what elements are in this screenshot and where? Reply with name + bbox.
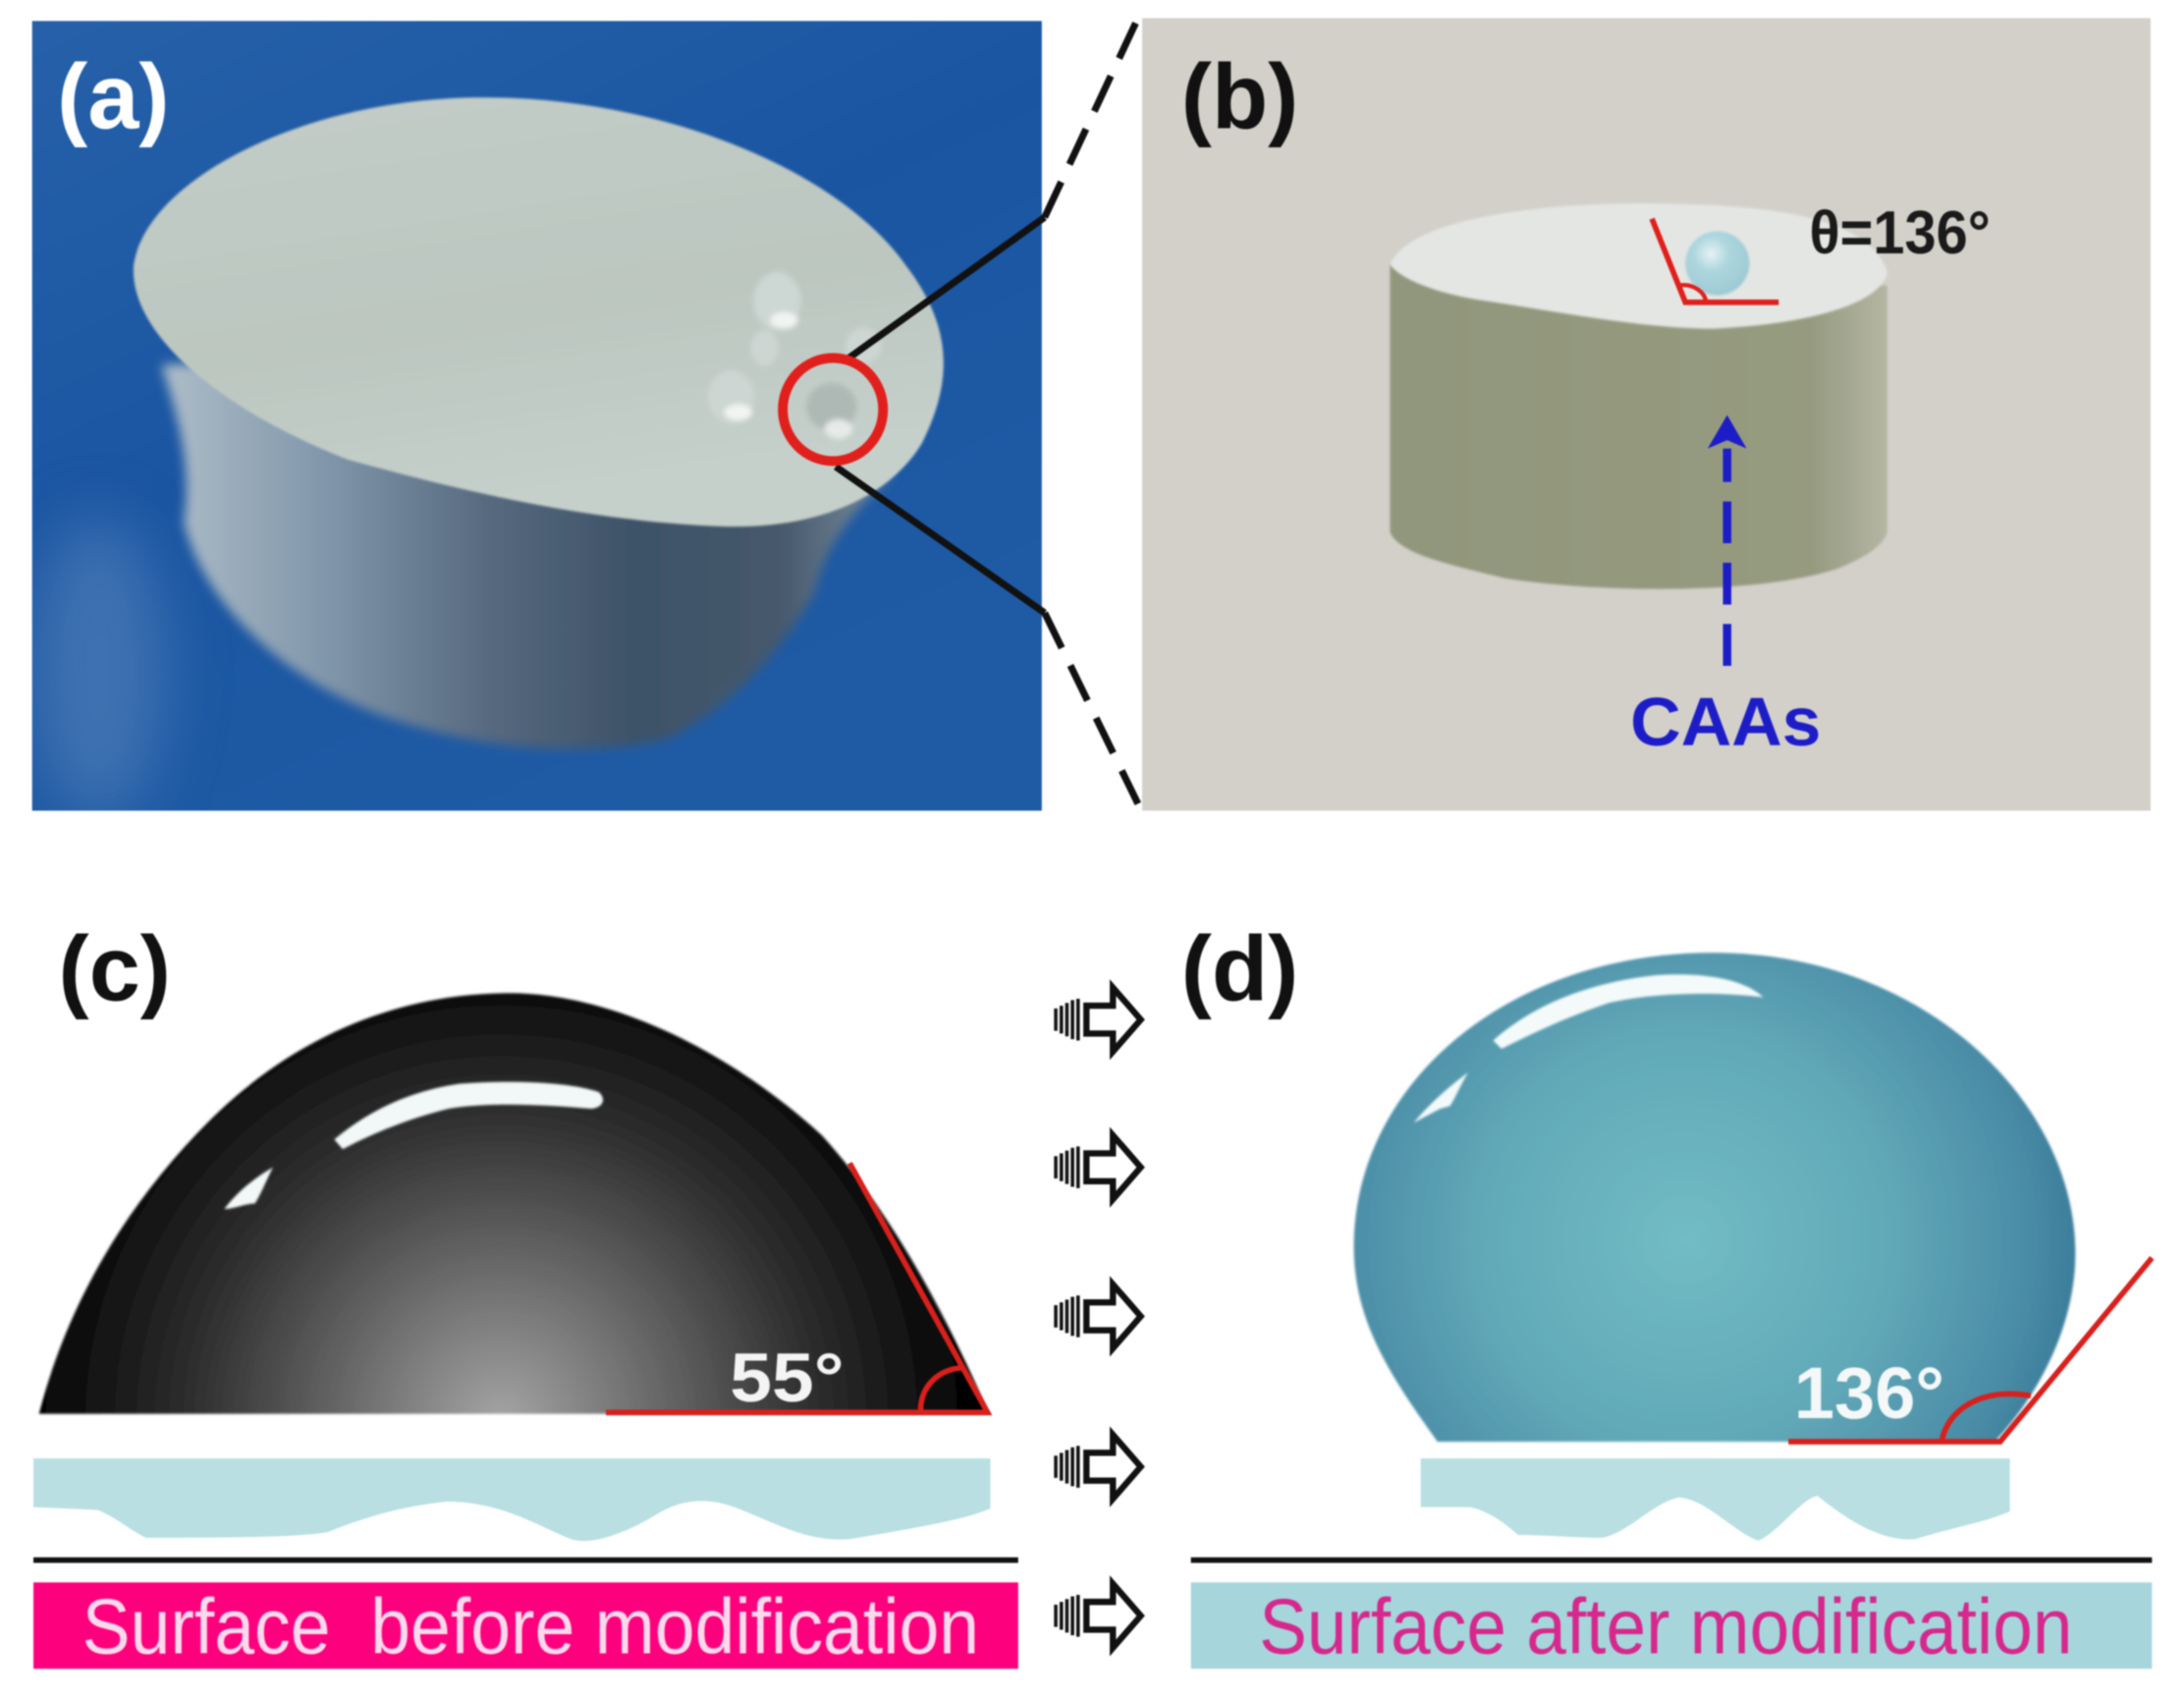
rough surface substrate bbox=[33, 1458, 990, 1541]
teal droplet bbox=[1354, 953, 2075, 1442]
panel a: photo of sample with droplets bbox=[27, 21, 1042, 822]
divider line bbox=[33, 1558, 1018, 1562]
contact angle 55 marker bbox=[606, 1163, 988, 1412]
zoom callout lines bbox=[836, 18, 1138, 803]
panel label b: (b) bbox=[1181, 44, 1298, 147]
panel label d: (d) bbox=[1181, 916, 1298, 1019]
black droplet bbox=[39, 993, 989, 1414]
red circle highlighting droplet bbox=[783, 358, 883, 461]
panel c: surface before modification bbox=[33, 916, 1018, 1671]
panel label a: (a) bbox=[57, 44, 170, 147]
panel b: schematic cylinder bbox=[1142, 18, 2151, 810]
panel background bbox=[1142, 18, 2151, 810]
droplet highlights bbox=[1414, 974, 1764, 1123]
arrow 1 bbox=[1056, 988, 1141, 1052]
arrow 5 bbox=[1056, 1584, 1141, 1648]
water droplets on sample bbox=[708, 272, 882, 439]
sample top face bbox=[134, 97, 944, 526]
contact angle marker bbox=[1652, 219, 1778, 302]
rough surface substrate bbox=[1421, 1458, 2010, 1541]
cylinder side bbox=[1391, 264, 1887, 589]
CAAs dashed arrow bbox=[1708, 415, 1747, 666]
panel d: surface after modification bbox=[1181, 916, 2152, 1671]
divider line bbox=[1191, 1558, 2152, 1562]
lighter table reflection bbox=[27, 516, 167, 822]
caption text: Surface after modification bbox=[1259, 1583, 2073, 1671]
136 degree label: 136° bbox=[1794, 1352, 1944, 1434]
arrow 2 bbox=[1056, 1135, 1141, 1199]
55 degree label: 55° bbox=[730, 1340, 845, 1417]
pink caption bar bbox=[33, 1582, 1018, 1669]
sample body side bbox=[162, 349, 892, 749]
droplet on cylinder bbox=[1685, 231, 1749, 296]
teal caption bar bbox=[1191, 1582, 2152, 1669]
panel label c: (c) bbox=[59, 916, 171, 1019]
arrow 3 bbox=[1056, 1285, 1141, 1348]
droplet highlights bbox=[224, 1082, 603, 1209]
photo background bbox=[32, 21, 1042, 810]
cylinder top face bbox=[1391, 203, 1887, 329]
contact angle 136 marker bbox=[1788, 1258, 2152, 1442]
arrow 4 bbox=[1056, 1435, 1141, 1499]
contact angle text: θ=136° bbox=[1809, 199, 1991, 267]
caption text: Surface before modification bbox=[82, 1583, 979, 1671]
CAAs label: CAAs bbox=[1630, 684, 1822, 760]
